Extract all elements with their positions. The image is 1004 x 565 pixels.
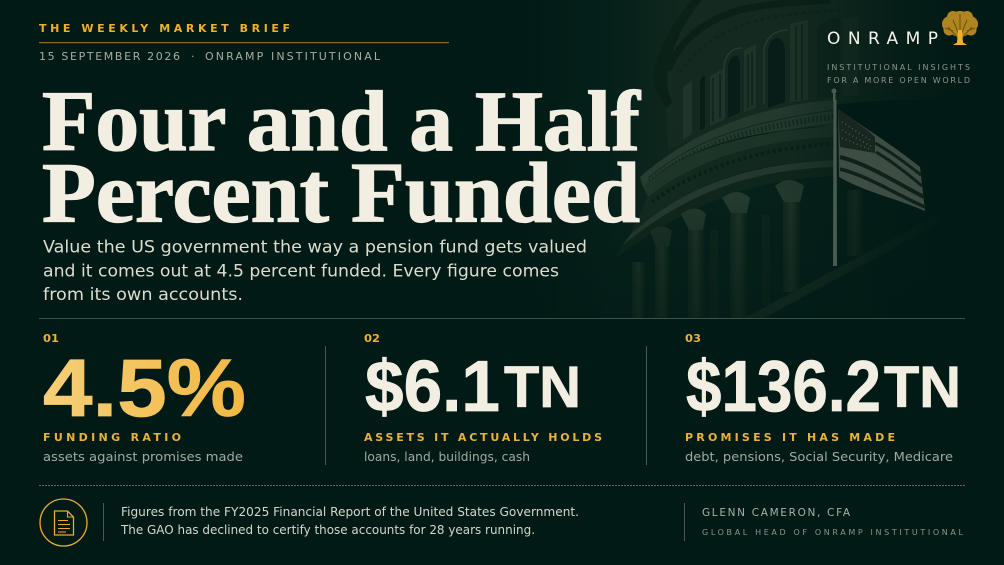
fade to right and bottom [640,0,1004,318]
stat 3 [685,332,961,464]
stat 1: FUNDING RATIO [43,431,181,444]
drum windows and pilasters [683,16,858,140]
balustrade [617,100,835,257]
stat 3: TN [884,355,961,420]
kicker rule [39,42,449,43]
stat 2: loans, land, buildings, cash [364,449,530,464]
icon: document [40,499,87,546]
stat 2: ASSETS IT ACTUALLY HOLDS [364,431,602,444]
stat 3: 03 [685,332,701,345]
author: GLENN CAMERON, CFA [702,507,851,519]
lower shadow mass [610,160,1004,318]
title [42,73,641,240]
title: Percent Funded [42,144,640,240]
author: GLOBAL HEAD OF ONRAMP INSTITUTIONAL [702,528,964,537]
stat 2 [364,332,602,464]
columns [632,180,863,318]
intro text: Value the US government the way a pension fund gets valued [43,238,587,256]
source note: Figures from the FY2025 Financial Report of the United States Government. [121,505,579,519]
stat 1: 01 [43,332,59,345]
logo: FOR A MORE OPEN WORLD [827,76,970,85]
logo tagline: INSTITUTIONAL INSIGHTS [827,63,970,72]
intro text [43,238,587,304]
date line: ONRAMP INSTITUTIONAL [205,50,381,63]
stat 1 [43,332,246,464]
kicker: THE WEEKLY MARKET BRIEF [39,22,290,35]
flag [838,109,925,211]
stat 3: debt, pensions, Social Security, Medicare [685,449,953,464]
entablature [630,137,835,235]
author [702,507,964,537]
upper drum wall [654,0,1004,150]
icon: tree [942,11,978,45]
stat 1: assets against promises made [43,449,243,464]
stat 2: 02 [364,332,380,345]
date line: 15 SEPTEMBER 2026 [39,50,180,63]
source note [120,505,579,537]
date line [39,50,381,63]
stat 3: PROMISES IT HAS MADE [685,431,895,444]
stat 2: $6.1 [365,347,500,427]
source note: The GAO has declined to certify those accounts for 28 years running. [120,523,535,537]
capitol building photo background [520,0,1004,318]
flagpole [833,100,837,266]
intro text: and it comes out at 4.5 percent funded. Every figure comes [43,262,559,280]
stat 3: $136.2 [686,347,881,427]
stair rail [744,186,1004,318]
logo wordmark: ONRAMP [827,29,938,49]
date line: · [191,50,194,63]
intro text: from its own accounts. [43,285,243,304]
stat 1: 4.5% [43,343,246,434]
logo [827,11,978,85]
title: Four and a Half [42,73,641,169]
stat 2: TN [504,355,581,420]
